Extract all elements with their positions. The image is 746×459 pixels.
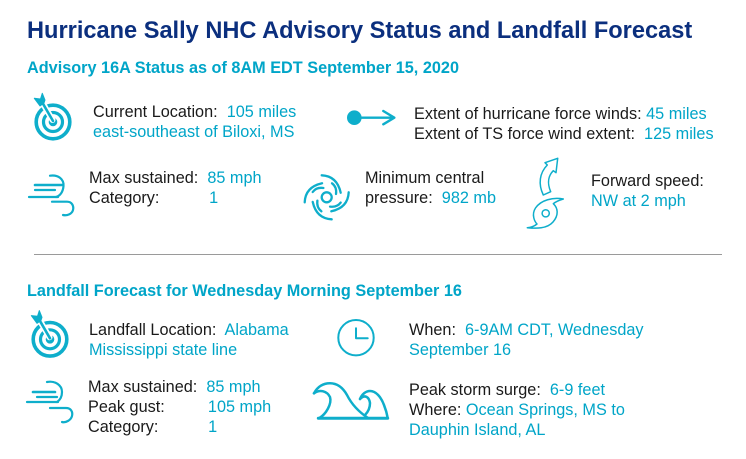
text: minimum central pressure: Minimum central pressure: 982 mb [365, 169, 496, 207]
icon: target with arrow [31, 311, 67, 356]
text: current location: Current Location: 105 miles east-southeast of Biloxi, MS [93, 103, 296, 141]
text: max sustained and category: Max sustained: 85 mph Category: 1 [89, 169, 262, 207]
text: storm surge: Peak storm surge: 6-9 feet Where: Ocean Springs, MS to Dauphin Island, AL [409, 381, 625, 439]
icon: wind [27, 382, 72, 422]
text: forward speed: Forward speed: NW at 2 mph [591, 172, 704, 210]
icon: waves [314, 383, 388, 418]
title: Hurricane Sally NHC Advisory Status and Landfall Forecast [27, 18, 692, 44]
icon: spiral storm [305, 175, 349, 219]
icon: wind [29, 176, 73, 215]
text: wind extent: Extent of hurricane force winds: 45 miles Extent of TS force wind extent: 125 miles [414, 105, 714, 143]
text: landfall location: Landfall Location: Alabama Mississippi state line [89, 321, 289, 359]
icon: storm with curved arrow [527, 158, 563, 228]
text: landfall time: When: 6-9AM CDT, Wednesday September 16 [409, 321, 644, 359]
icon: clock [338, 320, 374, 355]
icon: dot with arrow [347, 110, 394, 125]
heading: advisory status: Advisory 16A Status as of 8AM EDT September 15, 2020 [27, 58, 459, 76]
heading: landfall forecast: Landfall Forecast for Wednesday Morning September 16 [27, 282, 462, 300]
text: landfall winds: Max sustained: 85 mph Peak gust: 105 mph Category: 1 [88, 378, 271, 436]
icon: target with arrow [34, 93, 70, 139]
